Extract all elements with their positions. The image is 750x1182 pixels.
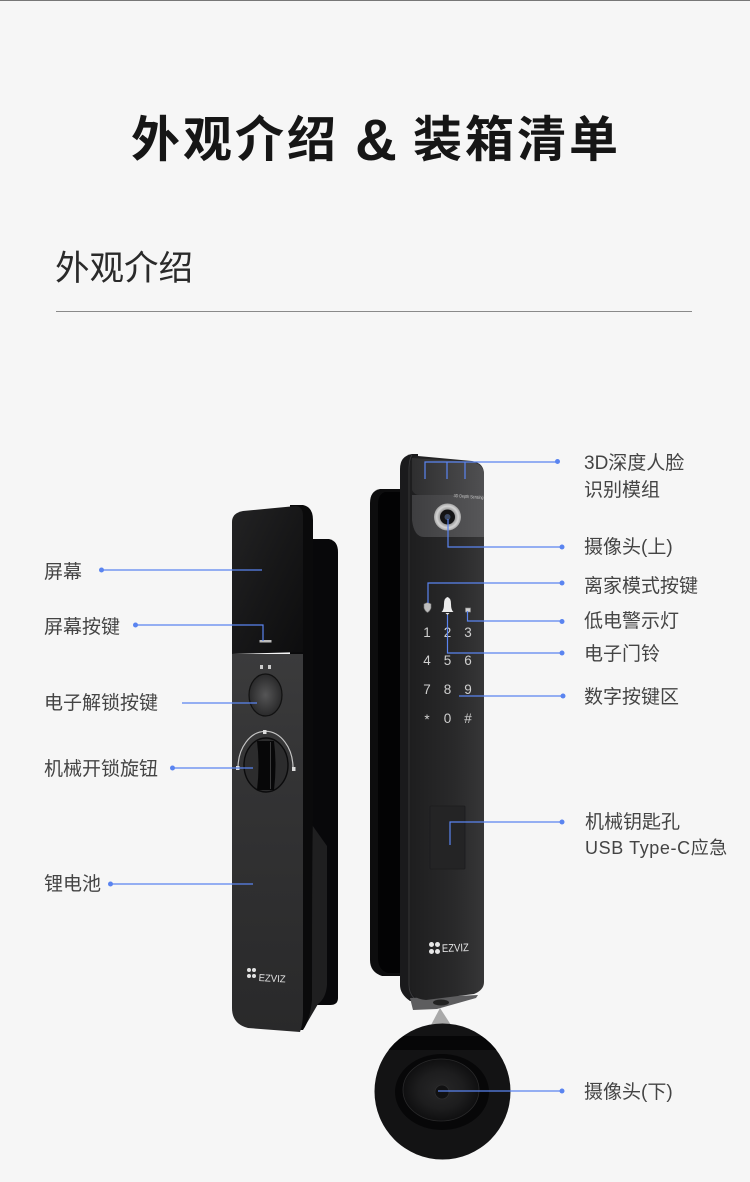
label: upper camera [448,519,673,558]
side edge [400,454,418,1001]
keypad: 3 [464,625,472,640]
keypad: # [464,711,472,726]
title: 外观介绍 [131,114,339,168]
label: key hole: USB Type-C应急 [585,838,728,858]
keypad: 2 [444,625,451,640]
product: rear lock right view [370,454,484,1010]
label: doorbell [448,615,660,665]
callout pointer [431,1008,451,1025]
unlock icon 2 [268,665,271,669]
camera lens centre [444,514,450,520]
back plate [370,489,400,976]
leader [425,462,557,479]
label: 3D face module: 识别模组 [584,479,660,501]
electronic knob [249,674,282,716]
label: screen: 屏幕 [44,561,82,583]
label: upper camera: 摄像头(上) [584,536,673,558]
thumb turn [244,738,288,792]
sensor dark band [412,458,484,495]
label: mechanical knob [44,758,253,780]
lower camera detail circle [374,1023,512,1160]
camera lens [440,510,455,524]
left logo: EZVIZ [258,973,286,985]
camera ring [434,504,461,530]
key cover [430,806,465,869]
label: keypad: 数字按键区 [584,686,679,708]
circle fill [374,1023,512,1160]
left logo [247,968,286,985]
keypad: 1 [423,625,431,640]
lens housing [395,1054,489,1130]
keypad: * [424,712,430,727]
top rule [0,0,750,1]
body [232,654,303,1032]
inner bracket [304,822,327,1028]
section heading: 外观介绍 [55,250,193,288]
dark strip [388,1036,496,1050]
label: keypad [459,686,679,708]
lens barrel [403,1059,479,1121]
right logo: EZVIZ [442,942,469,955]
label: screen button [44,616,263,641]
label: key hole: 机械钥匙孔 [585,811,680,833]
back plate [310,539,338,1005]
keypad: 5 [444,653,451,668]
front face [410,456,484,1000]
depth sensing text: 3D Depth Sensing [453,493,484,500]
side edge highlight [409,455,414,998]
lens centre [435,1085,449,1099]
keypad [423,625,472,727]
side edge [290,505,313,1030]
title: 装箱清单 [413,114,621,168]
title: & [355,108,397,173]
screen key [260,640,272,642]
label: screen [44,561,262,583]
keypad: 7 [423,682,431,697]
label: lithium battery [44,873,253,895]
label: 3D face module [425,452,684,501]
label: key hole [450,811,728,858]
label: lower camera [438,1081,673,1103]
label: electronic unlock: 电子解锁按键 [44,692,158,714]
keypad: 9 [464,682,472,697]
back plate inner [378,492,400,973]
label: away mode button: 离家模式按键 [584,575,698,597]
label: screen button: 屏幕按键 [44,616,120,638]
away icon [424,602,431,612]
label: 3D face module: 3D深度人脸 [584,452,684,474]
label: low battery light [468,610,679,632]
title [131,108,621,173]
keypad: 8 [444,682,451,697]
unlock icon 1 [260,665,263,669]
top sensor glass [412,495,484,537]
label: lithium battery: 锂电池 [44,873,101,895]
usb opening [433,1000,449,1006]
dial arc [238,731,293,768]
label: away mode button [428,575,698,603]
low battery icon [466,608,470,612]
dial marks [236,730,296,771]
heading divider [56,311,692,312]
label: low battery light: 低电警示灯 [584,610,679,632]
label: mechanical knob: 机械开锁旋钮 [44,758,158,780]
right logo [429,942,469,955]
thumb turn handle [257,741,276,790]
label: lower camera: 摄像头(下) [584,1081,673,1103]
keypad: 0 [444,711,451,726]
keypad: 6 [464,653,472,668]
keypad: 4 [423,653,431,668]
label: doorbell: 电子门铃 [584,643,660,665]
product: front lock left view [232,505,338,1032]
thumb turn highlight [270,742,271,789]
screen [232,506,303,654]
bottom silver edge [410,995,478,1010]
bell icon [442,597,454,615]
